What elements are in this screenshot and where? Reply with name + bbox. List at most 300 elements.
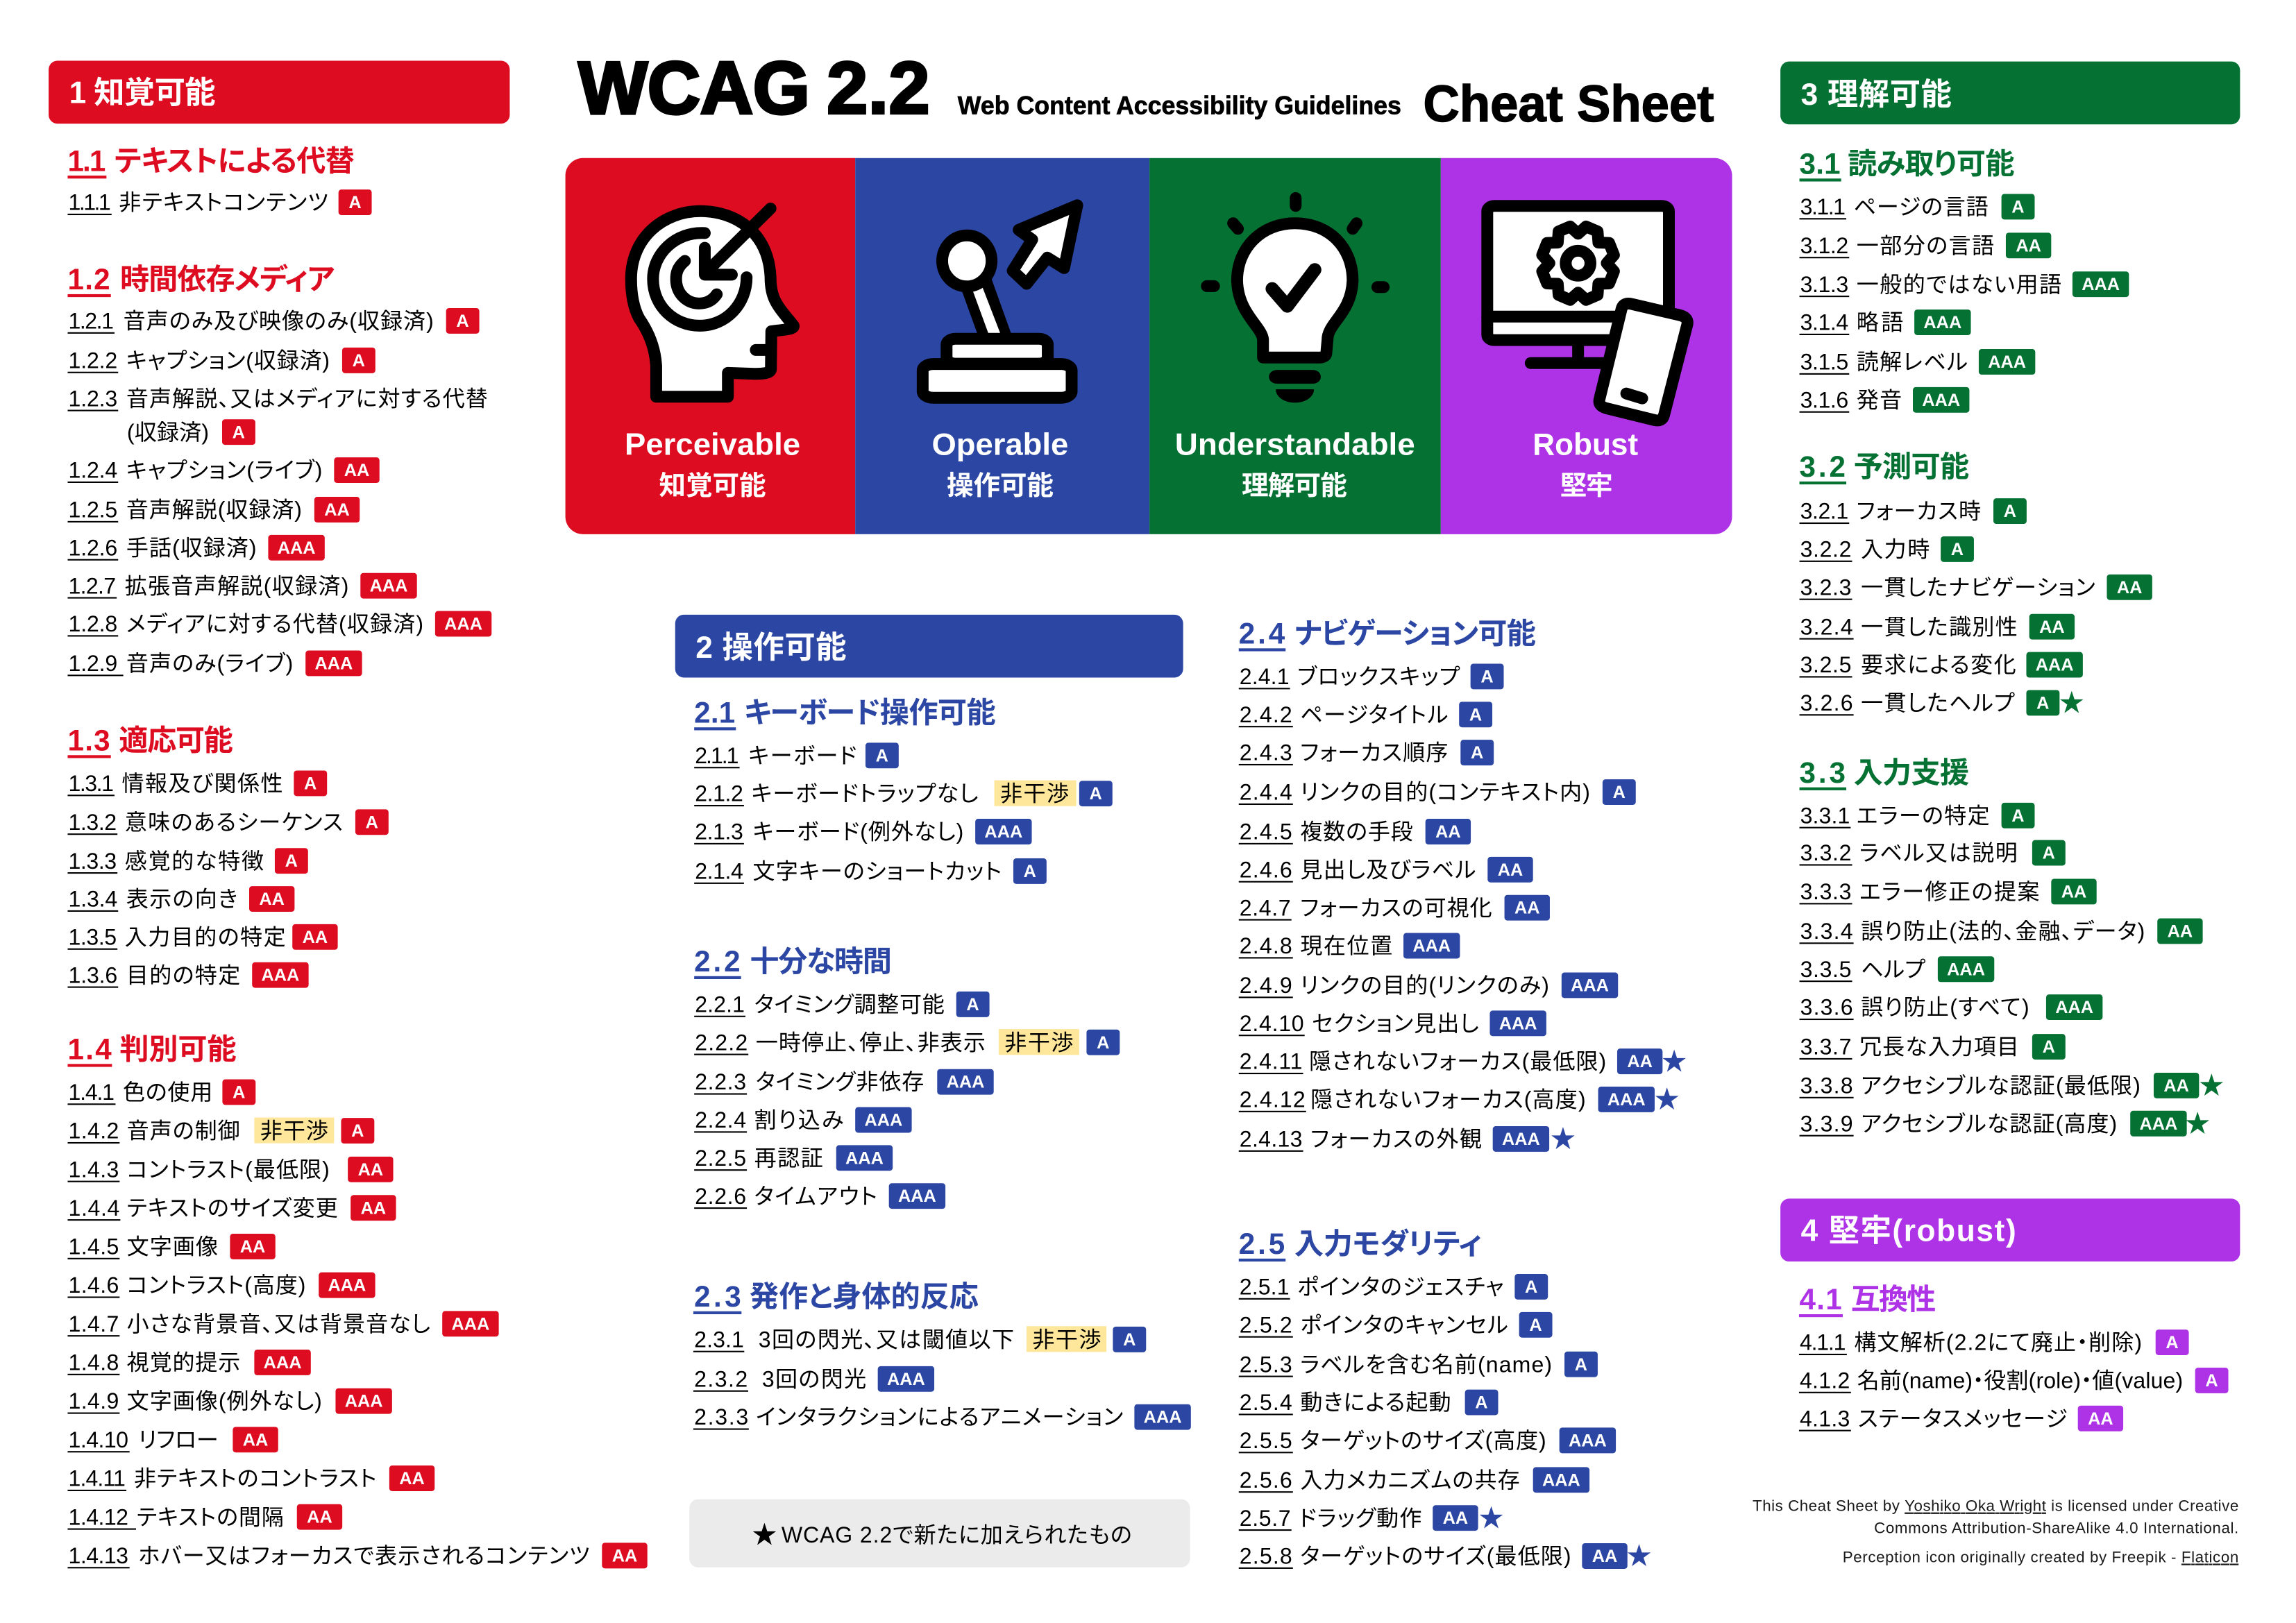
criterion 2.4.11 <box>1239 1048 1687 1076</box>
criterion 3.2.1: 3.2.1 <box>1800 499 1848 524</box>
criterion 2.4.11: 2.4.11 <box>1240 1049 1303 1074</box>
criterion 1.4.5: AA <box>240 1237 265 1257</box>
footer: license and credits: This Cheat Sheet by Yoshiko Oka Wright is licensed under Creative <box>1753 1497 2238 1515</box>
criterion 2.3.1: A <box>1123 1330 1136 1350</box>
criterion 3.3.4 <box>1800 918 2203 944</box>
section header 4: 4 堅牢(robust) <box>1801 1214 2016 1248</box>
criterion 2.4.10: セクション見出し <box>1312 1011 1479 1036</box>
criterion 1.3.2: A <box>366 813 378 832</box>
criterion 2.2.5: 2.2.5 <box>695 1146 746 1171</box>
criterion 2.5.2: 2.5.2 <box>1240 1312 1292 1337</box>
criterion 2.4.1 <box>1239 663 1504 689</box>
criterion 2.1.1: キーボード <box>748 743 856 768</box>
criterion 2.2.3: 2.2.3 <box>695 1069 746 1094</box>
criterion 3.1.5 <box>1800 349 2035 375</box>
criterion 2.5.7: AA <box>1443 1509 1468 1528</box>
criterion 1.4.3: 1.4.3 <box>69 1157 119 1182</box>
criterion 1.2.5: 音声解説(収録済) <box>126 498 302 522</box>
footer: license and credits: Commons Attribution-ShareAlike 4.0 International. <box>1874 1519 2238 1536</box>
criterion 1.4.11: AA <box>399 1469 425 1488</box>
criterion 1.4.3: AA <box>358 1160 383 1180</box>
criterion 3.3.2: 3.3.2 <box>1800 840 1851 865</box>
criterion 3.3.6: 3.3.6 <box>1800 995 1853 1020</box>
criterion 1.3.3: A <box>285 851 298 871</box>
criterion 2.5.3: ラベルを含む名前(name) <box>1300 1352 1552 1377</box>
criterion 3.1.2: 3.1.2 <box>1800 233 1848 258</box>
criterion 2.4.8: AAA <box>1412 937 1451 956</box>
criterion 2.4.7: 2.4.7 <box>1240 895 1291 920</box>
criterion 2.4.10: AAA <box>1499 1014 1537 1033</box>
criterion 1.2.1: A <box>456 312 469 331</box>
criterion 1.3.1: 情報及び関係性 <box>122 771 283 796</box>
criterion 4.1.1: 構文解析(2.2にて廃止・削除) <box>1854 1330 2142 1355</box>
criterion 2.4.1: ブロックスキップ <box>1297 664 1460 689</box>
criterion 1.3.6: AAA <box>262 966 299 985</box>
criterion 3.1.4: AAA <box>1923 313 1961 332</box>
criterion 3.3.8: アクセシブルな認証(最低限) <box>1861 1073 2141 1098</box>
criterion 3.1.5: AAA <box>1988 352 2026 372</box>
criterion 1.3.1: A <box>304 774 316 793</box>
criterion 1.4.8 <box>67 1350 311 1375</box>
criterion 3.1.1: 3.1.1 <box>1800 194 1846 219</box>
criterion 1.2.9: 音声のみ(ライブ) <box>126 651 293 676</box>
criterion 3.3.1 <box>1800 803 2034 829</box>
criterion 1.2.7 <box>67 573 417 599</box>
heading 1.3 <box>67 724 233 758</box>
criterion 2.4.2: A <box>1469 705 1482 724</box>
criterion 1.2.2 <box>67 348 375 373</box>
label: Understandable <box>1175 427 1415 501</box>
criterion 3.3.1: 3.3.1 <box>1800 803 1850 828</box>
criterion 3.2.3: 3.2.3 <box>1800 575 1851 600</box>
criterion 1.3.2 <box>67 809 389 835</box>
criterion 2.2.6: 2.2.6 <box>695 1184 746 1209</box>
heading 1.3: 1.3 <box>67 724 110 757</box>
section header 4 <box>1780 1198 2240 1261</box>
criterion 2.5.3: 2.5.3 <box>1240 1352 1292 1377</box>
criterion 2.2.2: 一時停止、停止、非表示 <box>756 1030 986 1055</box>
criterion 3.1.6: 発音 <box>1857 387 1902 412</box>
criterion 3.1.2: 一部分の言語 <box>1857 233 1994 258</box>
heading 1.2: 1.2 <box>67 263 110 296</box>
criterion 2.4.7 <box>1239 895 1550 921</box>
criterion 3.3.3: 3.3.3 <box>1800 879 1851 904</box>
criterion 1.2.5 <box>67 497 360 522</box>
criterion 2.4.5: 複数の手段 <box>1300 819 1413 844</box>
criterion 3.1.3: AAA <box>2082 275 2120 294</box>
heading 2.2 <box>694 945 892 979</box>
criterion 2.5.4: 動きによる起動 <box>1300 1390 1451 1415</box>
heading 3.2: 予測可能 <box>1854 450 1969 483</box>
criterion 2.2.1: タイミング調整可能 <box>754 992 945 1017</box>
criterion 2.2.5: 再認証 <box>754 1146 823 1171</box>
heading 1.4: 1.4 <box>67 1033 112 1066</box>
heading 4.1 <box>1799 1283 1936 1317</box>
heading 1.4: 判別可能 <box>119 1033 237 1066</box>
criterion 1.2.4 <box>67 457 380 483</box>
criterion 1.1.1: 非テキストコンテンツ <box>119 190 328 215</box>
heading 3.3: 入力支援 <box>1854 756 1969 789</box>
criterion 2.5.3 <box>1239 1352 1598 1377</box>
criterion 2.2.1: A <box>966 995 979 1014</box>
criterion 2.1.3: 2.1.3 <box>695 819 743 844</box>
criterion 1.3.5: 1.3.5 <box>69 924 117 949</box>
criterion 1.4.10: 1.4.10 <box>69 1427 128 1452</box>
criterion 1.3.3 <box>67 848 308 874</box>
criterion 2.5.8: ターゲットのサイズ(最低限) <box>1300 1544 1571 1569</box>
criterion 1.3.5: 入力目的の特定 <box>125 924 286 949</box>
heading 3.2: 3.2 <box>1800 450 1846 483</box>
criterion 3.2.3: 一貫したナビゲーション <box>1861 575 2095 600</box>
criterion 1.4.5 <box>67 1234 276 1259</box>
label: Operable: Operable <box>931 427 1068 461</box>
criterion 3.3.6: AAA <box>2055 998 2093 1017</box>
icon: head perception <box>631 209 793 397</box>
criterion 1.4.9: AAA <box>345 1392 383 1411</box>
criterion 2.1.3 <box>694 819 1032 844</box>
criterion 1.4.3 <box>67 1157 394 1182</box>
criterion 1.2.4: 1.2.4 <box>69 458 117 483</box>
criterion 1.4.11 <box>67 1465 434 1491</box>
criterion 2.4.8 <box>1239 933 1460 958</box>
criterion 2.2.5 <box>694 1145 893 1171</box>
criterion 2.4.9: AAA <box>1571 976 1609 995</box>
criterion 2.4.1: 2.4.1 <box>1240 664 1290 689</box>
criterion 1.2.9 <box>67 650 362 676</box>
criterion 3.3.3 <box>1800 879 2097 904</box>
criterion 3.2.5: 3.2.5 <box>1800 652 1851 677</box>
criterion 4.1.2: 名前(name)・役割(role)・値(value) <box>1857 1368 2183 1393</box>
criterion 3.3.2: ラベル又は説明 <box>1859 840 2018 865</box>
criterion 2.1.4 <box>694 858 1047 884</box>
criterion 1.3.4 <box>67 886 294 912</box>
criterion 3.2.4: 3.2.4 <box>1800 614 1853 639</box>
criterion 2.4.7: フォーカスの可視化 <box>1300 895 1492 920</box>
criterion 2.5.7: ★ <box>1479 1504 1504 1532</box>
criterion 3.3.1: エラーの特定 <box>1857 803 1990 828</box>
criterion 1.2.6 <box>67 535 325 561</box>
label: Understandable: Understandable <box>1175 427 1415 461</box>
criterion 1.4.6 <box>67 1273 375 1298</box>
criterion 3.2.4 <box>1800 614 2075 640</box>
criterion 2.4.8: 現在位置 <box>1300 933 1392 958</box>
criterion 1.4.2 <box>67 1118 374 1144</box>
criterion 3.1.2: AA <box>2016 236 2041 255</box>
criterion 3.2.4: 一貫した識別性 <box>1861 614 2018 639</box>
criterion 1.2.1: 音声のみ及び映像のみ(収録済) <box>124 308 434 333</box>
criterion 2.3.1 <box>693 1326 1146 1352</box>
panel: 3 理解可能 <box>1780 62 2240 1137</box>
criterion 2.2.6 <box>694 1183 945 1209</box>
criterion 3.1.3: 一般的ではない用語 <box>1857 272 2061 297</box>
criterion 1.4.6: コントラスト(高度) <box>127 1273 305 1298</box>
criterion 2.5.4: 2.5.4 <box>1240 1390 1292 1415</box>
criterion 2.5.8: ★ <box>1627 1543 1652 1570</box>
criterion 2.5.6: AAA <box>1542 1470 1580 1490</box>
criterion 2.4.5: 2.4.5 <box>1240 819 1292 844</box>
criterion 3.1.4: 3.1.4 <box>1800 310 1848 335</box>
legend: new in WCAG 2.2: WCAG 2.2で新たに加えられたもの <box>782 1522 1132 1547</box>
criterion 1.2.4: キャプション(ライブ) <box>126 458 322 483</box>
section header 1: 1 知覚可能 <box>69 76 215 110</box>
criterion 1.3.6: 1.3.6 <box>69 962 117 987</box>
criterion 2.2.4: 割り込み <box>754 1107 843 1132</box>
heading 2.5: 2.5 <box>1239 1227 1285 1260</box>
criterion 2.2.1 <box>694 992 990 1017</box>
criterion 2.1.3: キーボード(例外なし) <box>753 819 963 844</box>
criterion 3.3.5: 3.3.5 <box>1800 957 1851 982</box>
heading 3.3 <box>1800 756 1969 790</box>
heading 3.1: 読み取り可能 <box>1848 148 2015 180</box>
criterion 3.2.6 <box>1800 689 2084 717</box>
criterion 1.3.5 <box>67 924 338 950</box>
legend: new in WCAG 2.2 <box>689 1499 1190 1567</box>
criterion 2.5.4 <box>1239 1390 1498 1416</box>
icon: joystick <box>922 205 1077 398</box>
criterion 3.2.2: 入力時 <box>1861 537 1930 562</box>
label: Understandable: 理解可能 <box>1242 471 1347 501</box>
criterion 4.1.3: 4.1.3 <box>1800 1406 1850 1431</box>
criterion 2.5.1 <box>1239 1274 1548 1300</box>
heading 2.2: 2.2 <box>694 945 741 978</box>
label: Robust: Robust <box>1533 427 1638 461</box>
criterion 1.4.2: A <box>351 1121 364 1141</box>
criterion 3.3.6 <box>1800 994 2102 1020</box>
criterion 2.4.6: 2.4.6 <box>1240 857 1292 882</box>
criterion 3.1.1: A <box>2011 197 2025 216</box>
criterion 1.4.3: コントラスト(最低限) <box>127 1157 330 1182</box>
criterion 1.2.3: A <box>233 423 245 442</box>
heading 1.2: 時間依存メディア <box>120 263 335 296</box>
footer: license and credits <box>1753 1497 2238 1565</box>
criterion 2.4.9: 2.4.9 <box>1240 973 1292 998</box>
criterion 3.2.6: 一貫したヘルプ <box>1861 690 2015 715</box>
criterion 1.2.2: キャプション(収録済) <box>126 348 330 373</box>
criterion 2.4.4: リンクの目的(コンテキスト内) <box>1300 780 1590 805</box>
panel: 1 知覚可能 <box>49 61 648 1568</box>
criterion 2.5.6 <box>1239 1467 1589 1493</box>
label: Operable <box>931 427 1068 501</box>
criterion 3.1.5: 読解レベル <box>1857 350 1968 375</box>
criterion 2.1.2: キーボードトラップなし <box>751 781 978 806</box>
criterion 1.2.8: 1.2.8 <box>69 611 117 636</box>
criterion 1.3.2: 意味のあるシーケンス <box>125 810 343 835</box>
criterion 1.2.3: 1.2.3 <box>69 386 117 411</box>
panel: 4 堅牢 <box>1780 1198 2240 1431</box>
section header 2: 2 操作可能 <box>695 631 847 665</box>
criterion 2.2.1: 2.2.1 <box>695 992 745 1017</box>
criterion 1.3.6 <box>67 962 309 988</box>
criterion 3.3.9: AAA <box>2140 1114 2177 1134</box>
criterion 3.2.4: AA <box>2039 618 2065 637</box>
criterion 2.5.2: A <box>1529 1316 1542 1335</box>
icon: light bulb with check <box>1207 198 1384 402</box>
criterion 2.4.4: A <box>1613 783 1626 802</box>
criterion 1.2.3: (収録済) <box>127 420 209 445</box>
criterion 3.2.3 <box>1800 575 2152 600</box>
criterion 3.1.6: AAA <box>1922 391 1960 410</box>
criterion 3.3.9: アクセシブルな認証(高度) <box>1861 1111 2117 1136</box>
heading 1.1: 1.1 <box>67 144 105 177</box>
criterion 1.2.6: 1.2.6 <box>69 535 117 560</box>
label: Robust: 堅牢 <box>1560 471 1613 501</box>
criterion 1.4.1: 1.4.1 <box>69 1080 115 1105</box>
criterion 1.4.11: 1.4.11 <box>69 1466 126 1491</box>
criterion 1.2.5: 1.2.5 <box>69 498 117 522</box>
criterion 2.3.1: 3回の閃光、又は閾値以下 <box>759 1327 1014 1352</box>
criterion 2.4.6: 見出し及びラベル <box>1300 857 1476 882</box>
criterion 3.3.4: AA <box>2168 921 2193 941</box>
criterion 4.1.1: 4.1.1 <box>1800 1330 1846 1355</box>
criterion 2.2.2: A <box>1097 1033 1109 1053</box>
criterion 2.5.8: 2.5.8 <box>1240 1544 1292 1569</box>
panel: 2 操作可能 (right column) <box>1239 618 1687 1570</box>
criterion 3.2.6: ★ <box>2059 689 2084 717</box>
criterion 3.2.6: A <box>2036 693 2049 713</box>
criterion 4.1.1: A <box>2166 1333 2179 1352</box>
criterion 3.3.7: 3.3.7 <box>1800 1035 1851 1060</box>
heading 1.3: 適応可能 <box>119 724 233 757</box>
criterion 2.4.9 <box>1239 973 1618 998</box>
criterion 2.3.1: 2.3.1 <box>694 1327 744 1352</box>
criterion 2.2.2 <box>694 1029 1120 1055</box>
criterion 1.2.6: AAA <box>278 538 316 558</box>
criterion 1.3.3: 1.3.3 <box>69 849 117 874</box>
criterion 1.2.9: AAA <box>315 654 353 673</box>
criterion 2.4.13: AAA <box>1502 1130 1540 1149</box>
heading 2.4: 2.4 <box>1239 618 1285 650</box>
section header 2 <box>675 615 1183 678</box>
criterion 3.2.1: フォーカス時 <box>1857 499 1981 524</box>
criterion 2.3.2 <box>693 1366 934 1392</box>
criterion 2.2.4: AAA <box>864 1111 902 1130</box>
criterion 4.1.3 <box>1799 1406 2123 1431</box>
criterion 2.4.13: フォーカスの外観 <box>1310 1126 1482 1151</box>
criterion 2.1.4: 文字キーのショートカット <box>753 859 1002 884</box>
title: WCAG 2.2 <box>579 47 930 130</box>
criterion 3.2.6: 3.2.6 <box>1800 690 1853 715</box>
criterion 2.1.3: AAA <box>984 822 1022 842</box>
criterion 2.5.1: A <box>1525 1277 1537 1297</box>
criterion 1.2.4: AA <box>344 461 369 480</box>
criterion 1.2.3 <box>67 386 488 445</box>
criterion 2.4.1: A <box>1480 667 1494 686</box>
criterion 2.4.13: 2.4.13 <box>1240 1126 1303 1151</box>
criterion 2.3.3: 2.3.3 <box>694 1404 748 1429</box>
criterion 2.5.6: 2.5.6 <box>1240 1468 1292 1493</box>
criterion 3.3.7 <box>1800 1034 2066 1060</box>
criterion 1.3.2: 1.3.2 <box>69 810 117 835</box>
criterion 1.4.8: AAA <box>264 1353 302 1373</box>
criterion 2.4.13: ★ <box>1551 1125 1576 1153</box>
criterion 3.3.8: ★ <box>2199 1072 2224 1100</box>
criterion 2.4.12: AAA <box>1607 1090 1646 1110</box>
criterion 1.2.8: AAA <box>444 615 482 634</box>
criterion 3.1.6 <box>1800 387 1969 413</box>
criterion 1.3.4: 1.3.4 <box>69 887 117 912</box>
criterion 1.3.4: 表示の向き <box>126 887 237 912</box>
criterion 1.4.7 <box>67 1311 499 1336</box>
criterion 1.4.5: 1.4.5 <box>69 1234 119 1259</box>
criterion 1.4.4: 1.4.4 <box>69 1196 119 1221</box>
criterion 2.4.4: 2.4.4 <box>1240 780 1292 805</box>
section header 3: 3 理解可能 <box>1801 78 1952 112</box>
criterion 2.1.2: A <box>1090 784 1102 804</box>
criterion 3.3.5: AAA <box>1947 960 1985 979</box>
criterion 3.1.5: 3.1.5 <box>1800 350 1848 375</box>
criterion 1.4.5: 文字画像 <box>127 1234 218 1259</box>
criterion 4.1.2: A <box>2205 1371 2218 1391</box>
heading 2.2: 十分な時間 <box>750 945 892 978</box>
heading 4.1: 互換性 <box>1851 1283 1936 1316</box>
criterion 3.2.2 <box>1800 536 1974 562</box>
criterion 2.3.3: AAA <box>1144 1408 1181 1427</box>
criterion 2.4.6: AA <box>1498 860 1523 880</box>
criterion 3.3.5 <box>1800 956 1994 982</box>
criterion 2.4.10 <box>1239 1010 1546 1036</box>
criterion 3.3.2 <box>1800 840 2066 866</box>
criterion 1.4.2: 非干渉 <box>260 1119 328 1144</box>
criterion 2.1.2: 非干渉 <box>1000 781 1069 806</box>
criterion 3.2.5: 要求による変化 <box>1861 652 2016 677</box>
criterion 1.1.1: A <box>348 193 362 212</box>
criterion 3.1.4 <box>1800 309 1971 335</box>
title: WCAG 2.2: 2.2 <box>827 47 930 130</box>
criterion 3.3.7: 冗長な入力項目 <box>1859 1035 2019 1060</box>
heading 4.1: 4.1 <box>1800 1283 1842 1316</box>
label: Operable: 操作可能 <box>947 471 1054 501</box>
criterion 1.2.1: 1.2.1 <box>69 308 114 333</box>
criterion 2.1.4: 2.1.4 <box>695 859 743 884</box>
criterion 2.4.11: ★ <box>1662 1048 1687 1076</box>
criterion 3.3.9 <box>1800 1110 2210 1137</box>
criterion 3.2.2: 3.2.2 <box>1800 537 1851 562</box>
criterion 1.4.12: AA <box>307 1508 332 1527</box>
heading 1.1: テキストによる代替 <box>115 144 355 177</box>
section header 3 <box>1780 62 2240 124</box>
criterion 3.3.9: ★ <box>2185 1110 2210 1137</box>
criterion 2.2.4 <box>694 1107 912 1132</box>
criterion 1.2.6: 手話(収録済) <box>126 535 257 560</box>
criterion 3.1.6: 3.1.6 <box>1800 387 1848 412</box>
criterion 2.5.1: 2.5.1 <box>1240 1275 1290 1300</box>
criterion 2.4.12: 2.4.12 <box>1240 1087 1306 1112</box>
criterion 1.3.6: 目的の特定 <box>126 962 240 987</box>
criterion 2.5.6: 入力メカニズムの共存 <box>1300 1468 1520 1493</box>
criterion 3.3.8: 3.3.8 <box>1800 1073 1853 1098</box>
criterion 2.2.4: 2.2.4 <box>695 1107 746 1132</box>
criterion 2.1.4: A <box>1024 862 1036 881</box>
criterion 1.1.1: 1.1.1 <box>69 190 111 215</box>
criterion 2.5.8 <box>1239 1543 1652 1570</box>
heading 3.3: 3.3 <box>1800 756 1846 789</box>
criterion 3.3.3: エラー修正の提案 <box>1859 879 2039 904</box>
criterion 3.2.5: AAA <box>2036 656 2074 675</box>
criterion 2.4.11: 隠されないフォーカス(最低限) <box>1309 1049 1606 1074</box>
criterion 3.1.4: 略語 <box>1857 310 1903 335</box>
criterion 1.1.1 <box>67 189 372 215</box>
criterion 2.1.2 <box>694 781 1113 806</box>
criterion 1.4.7: 小さな背景音、又は背景音なし <box>127 1311 430 1336</box>
criterion 4.1.3: AA <box>2088 1409 2113 1429</box>
criterion 2.5.2 <box>1239 1312 1553 1338</box>
criterion 3.3.2: A <box>2043 844 2055 863</box>
criterion 2.5.8: AA <box>1592 1547 1617 1566</box>
criterion 2.4.13 <box>1239 1125 1576 1153</box>
criterion 2.5.3: A <box>1575 1355 1587 1375</box>
criterion 1.4.2: 1.4.2 <box>69 1119 119 1144</box>
heading 1.4 <box>67 1033 237 1067</box>
